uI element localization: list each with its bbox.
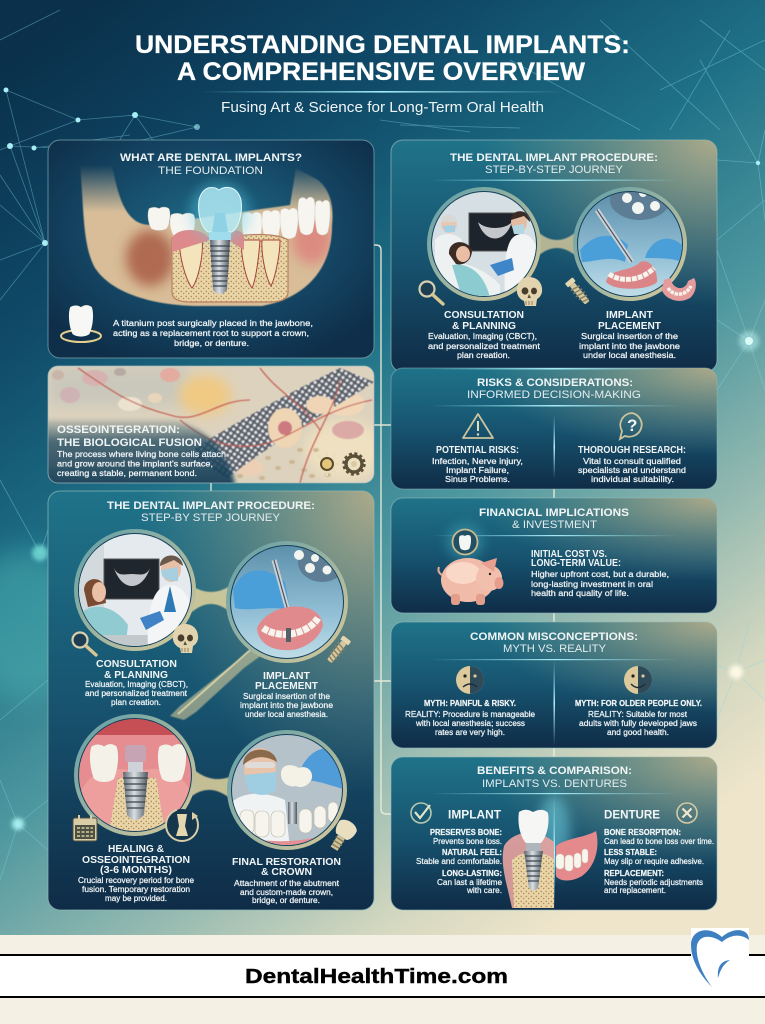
icon: tooth on gold ring (61, 305, 101, 342)
heading (120, 152, 302, 177)
text block: myth two (575, 698, 702, 737)
icon: skull (173, 624, 198, 653)
icon: magnifier (72, 632, 96, 655)
step text: consultation and planning: plan creation. (457, 350, 510, 360)
step image: consultation (429, 189, 542, 300)
step text: implant placement: implant into the jawbone (579, 341, 680, 351)
text block: potential risks: Implant Failure, (446, 465, 509, 475)
step text: consultation and planning: and personalized treatment (85, 688, 188, 698)
heading (450, 152, 658, 176)
step text: healing and osseointegration: (3-6 MONTHS) (100, 865, 172, 876)
heading: BENEFITS & COMPARISON: (477, 765, 632, 777)
text block: initial cost vs long-term value: LONG-TERM VALUE: (531, 558, 621, 569)
logo: blue tooth (691, 928, 749, 987)
panel: benefits and comparison (391, 757, 717, 910)
heading: COMMON MISCONCEPTIONS: (470, 631, 638, 643)
gold connector between circles (538, 232, 576, 256)
step text: healing and osseointegration (78, 844, 194, 903)
text block: myth two: REALITY: Suitable for most (588, 709, 688, 719)
text block: thorough research: specialists and understand (578, 465, 686, 475)
step text: healing and osseointegration: Crucial recovery period for bone (78, 875, 194, 885)
illustration: implant tooth and denture (503, 810, 597, 908)
subtitle: Fusing Art & Science for Long-Term Oral Health (221, 99, 544, 116)
text block: potential risks: Infection, Nerve injury, (432, 456, 523, 466)
heading (479, 507, 629, 531)
heading: WHAT ARE DENTAL IMPLANTS? (120, 152, 302, 164)
step text: implant placement: PLACEMENT (598, 321, 661, 332)
text block: implant benefits: LONG-LASTING: (442, 868, 502, 878)
text block: initial cost vs long-term value (531, 549, 669, 598)
step text: consultation and planning: CONSULTATION (96, 659, 177, 670)
text block: thorough research (578, 445, 686, 484)
text block: implant benefits: Prevents bone loss. (433, 836, 502, 846)
step text: implant placement: under local anesthesia. (245, 709, 328, 719)
text block: myth two: and good health. (607, 727, 669, 737)
step text: healing and osseointegration: may be provided. (105, 893, 167, 903)
illustration: bone cells and implant mesh (48, 366, 374, 483)
icon: skull (517, 277, 542, 306)
text block: denture drawbacks: and replacement. (604, 885, 666, 895)
heading (477, 765, 632, 790)
step text: implant placement: implant into the jawbone (240, 700, 333, 710)
text block: denture drawbacks: Needs periodic adjustments (604, 877, 704, 887)
text block: implant benefits: Can last a lifetime (437, 877, 502, 887)
text block: thorough research: Vital to consult qualified (583, 456, 681, 466)
step image: consultation (75, 530, 196, 650)
text block: denture drawbacks: May slip or require adhesive. (604, 856, 704, 866)
step text: consultation and planning: CONSULTATION (444, 310, 524, 321)
icon: check circle (411, 803, 431, 823)
step text: implant placement: Surgical insertion of the (581, 331, 678, 341)
text block: myth one (405, 698, 535, 737)
text block: and grow around the implant's surface, (57, 458, 213, 468)
text block: The process where living bone cells attach (57, 449, 226, 459)
icon: calendar (73, 815, 97, 841)
icon: healing cycle (166, 809, 198, 841)
website address: DentalHealthTime.com (245, 965, 508, 988)
text block: denture drawbacks: REPLACEMENT: (604, 868, 664, 878)
panel: risks and considerations (391, 368, 717, 489)
heading (467, 377, 641, 401)
panel: financial implications (391, 498, 717, 613)
heading: & INVESTMENT (512, 519, 597, 531)
icon: piggy bank with tooth coin (438, 524, 504, 605)
text block: potential risks: Sinus Problems. (445, 474, 510, 484)
panel: common misconceptions (391, 622, 717, 748)
step text: implant placement: Surgical insertion of the (243, 691, 330, 701)
label: denture: DENTURE (604, 808, 660, 822)
heading: OSSEOINTEGRATION: (57, 424, 180, 436)
icon: x circle (677, 803, 697, 823)
text block: denture drawbacks: LESS STABLE: (604, 847, 657, 857)
icon: sun cell and gear (315, 452, 364, 476)
text block: creating a stable, permanent bond. (57, 468, 197, 478)
gold connectors between circles (170, 586, 266, 800)
step text: healing and osseointegration: fusion. Temporary restoration (82, 884, 190, 894)
text block: myth two: MYTH: FOR OLDER PEOPLE ONLY. (575, 698, 702, 708)
illustration: jaw cross-section with implant (80, 165, 332, 306)
icon: implant screw (325, 635, 351, 664)
step text: healing and osseointegration: OSSEOINTEGRATION (82, 855, 190, 866)
text block (113, 318, 313, 348)
title: UNDERSTANDING DENTAL IMPLANTS: (135, 31, 630, 59)
text block: initial cost vs long-term value: health and quality of life. (531, 588, 629, 598)
step text: consultation and planning (428, 310, 541, 360)
step text: healing and osseointegration: HEALING & (108, 844, 164, 855)
heading: THE DENTAL IMPLANT PROCEDURE: (107, 500, 315, 512)
step text: consultation and planning: and personalized treatment (428, 341, 541, 351)
icon: question bubble (620, 413, 642, 439)
text block: acting as a replacement root to support a crown, (113, 328, 309, 338)
text block: implant benefits: NATURAL FEEL: (442, 847, 502, 857)
step text: implant placement: under local anesthesia. (583, 350, 676, 360)
text block: implant benefits: PRESERVES BONE: (430, 827, 502, 837)
heading: MYTH VS. REALITY (503, 643, 607, 655)
text block: denture drawbacks: BONE RESORPTION: (604, 827, 681, 837)
step text: final restoration: Attachment of the abutment (234, 878, 340, 888)
step text: implant placement (579, 310, 680, 360)
title: A COMPREHENSIVE OVERVIEW (177, 58, 585, 86)
footer band (0, 935, 765, 1024)
icon: question bubble: ? (627, 416, 637, 435)
text block: myth one: with local anesthesia; success (415, 718, 526, 728)
connector lines between panels (211, 245, 554, 814)
text block: bridge, or denture. (174, 338, 249, 348)
text block: initial cost vs long-term value: Higher upfront cost, but a durable, (531, 569, 669, 579)
step text: final restoration: bridge, or denture. (252, 895, 320, 905)
text block: denture drawbacks (604, 827, 714, 895)
heading (470, 631, 638, 655)
text block: myth one: MYTH: PAINFUL & RISKY. (424, 698, 516, 708)
step text: consultation and planning: Evaluation, Imaging (CBCT), (85, 679, 188, 689)
heading (57, 424, 202, 449)
text block (57, 449, 226, 478)
text block: potential risks (432, 445, 523, 484)
icon: denture (662, 278, 696, 301)
step text: implant placement: IMPLANT (263, 671, 310, 682)
heading (107, 500, 315, 524)
text block: implant benefits: with care. (466, 885, 502, 895)
step image: healing (76, 715, 196, 840)
panel: osseointegration (40, 366, 385, 490)
text block: initial cost vs long-term value: INITIAL COST VS. (531, 549, 607, 560)
text block: myth one: rates are very high. (435, 727, 505, 737)
text block: implant benefits: Stable and comfortable. (416, 856, 502, 866)
heading: FINANCIAL IMPLICATIONS (479, 507, 629, 519)
text block: implant benefits (416, 827, 502, 895)
panel: procedure, four steps (48, 491, 374, 910)
text block: initial cost vs long-term value: long-lasting investment in oral (531, 579, 653, 589)
background: soft teal glow (0, 550, 85, 700)
step image: implant placement (228, 542, 348, 663)
step text: final restoration (232, 857, 341, 905)
step text: final restoration: and custom-made crown, (240, 887, 333, 897)
step text: implant placement: IMPLANT (606, 310, 653, 321)
icon: implant screw (565, 277, 591, 306)
text block: myth one: REALITY: Procedure is manageable (405, 709, 535, 719)
icon: crown on screw (325, 817, 359, 854)
icon: warning triangle (463, 414, 493, 438)
panel: what are dental implants (48, 140, 374, 358)
icon: happy face (624, 666, 652, 694)
title (135, 31, 630, 86)
heading: INFORMED DECISION-MAKING (467, 389, 641, 401)
step image: implant placement (575, 180, 686, 300)
step text: implant placement: PLACEMENT (255, 681, 318, 692)
step image: final restoration (229, 732, 349, 855)
heading: THE DENTAL IMPLANT PROCEDURE: (450, 152, 658, 164)
step text: consultation and planning (85, 659, 188, 707)
icon: magnifier (420, 282, 443, 304)
step text: consultation and planning: & PLANNING (104, 670, 168, 681)
heading: STEP-BY STEP JOURNEY (141, 512, 281, 524)
text block: myth two: adults with fully developed jaws (579, 718, 698, 728)
label: implant: IMPLANT (448, 808, 502, 822)
step text: implant placement (240, 671, 333, 719)
step text: consultation and planning: plan creation. (111, 697, 161, 707)
panel: procedure, two steps (391, 140, 717, 372)
heading: THE FOUNDATION (158, 165, 263, 177)
heading: STEP-BY-STEP JOURNEY (485, 164, 624, 176)
step text: final restoration: & CROWN (261, 867, 312, 878)
step text: final restoration: FINAL RESTORATION (232, 857, 341, 868)
icon: sad face (456, 666, 484, 694)
step text: consultation and planning: & PLANNING (452, 321, 516, 332)
heading: THE BIOLOGICAL FUSION (57, 437, 202, 449)
step text: consultation and planning: Evaluation, Imaging (CBCT), (428, 331, 537, 341)
heading: IMPLANTS VS. DENTURES (482, 778, 627, 790)
text block: potential risks: POTENTIAL RISKS: (436, 445, 519, 456)
text block: A titanium post surgically placed in the jawbone, (113, 318, 313, 328)
text block: denture drawbacks: Can lead to bone loss over time. (604, 836, 714, 846)
heading: RISKS & CONSIDERATIONS: (477, 377, 633, 389)
text block: thorough research: individual suitability. (591, 474, 674, 484)
text block: thorough research: THOROUGH RESEARCH: (578, 445, 686, 456)
